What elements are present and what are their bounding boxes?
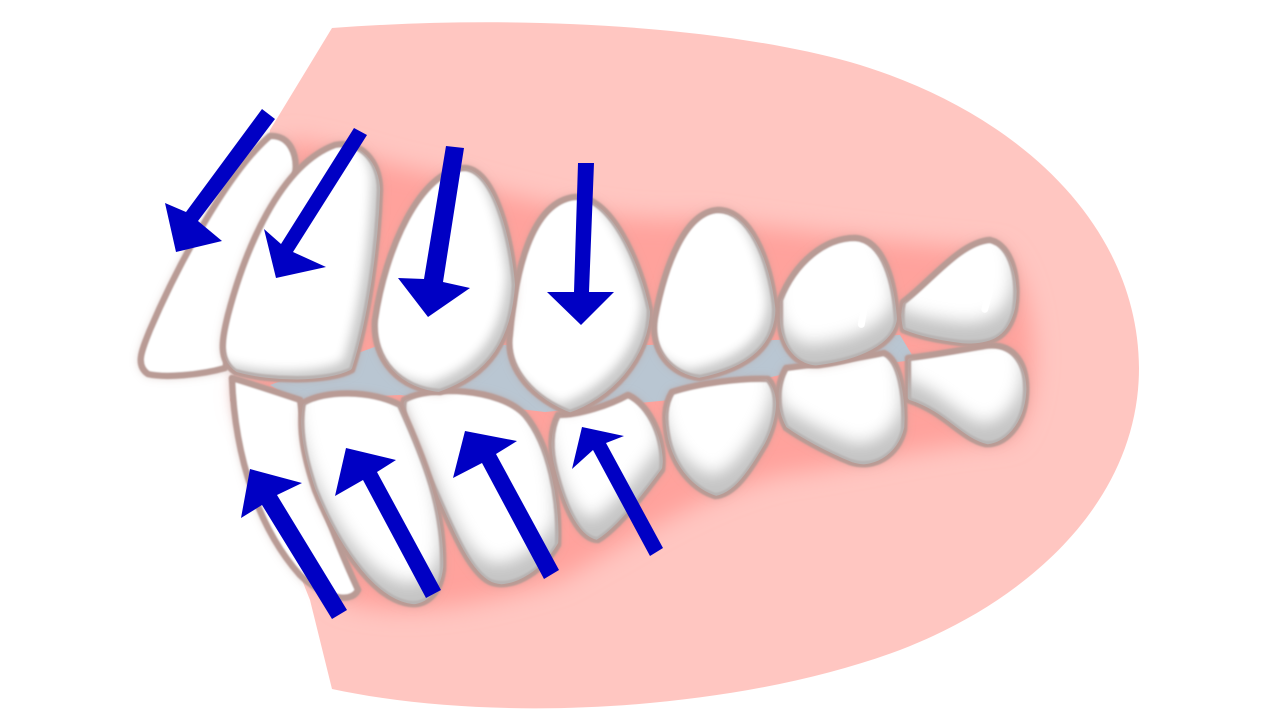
upper teeth xyxy=(141,136,1016,413)
lower premolar xyxy=(665,379,776,496)
upper tooth 4 xyxy=(509,197,650,413)
gap between teeth xyxy=(270,335,915,412)
gum xyxy=(230,22,1139,708)
upper premolar xyxy=(654,210,775,378)
arrow: upper 2 xyxy=(264,128,367,278)
arrow: lower 4 xyxy=(572,427,663,556)
lower tooth 6 xyxy=(403,391,558,584)
arrow: upper 3 xyxy=(398,146,470,317)
upper tooth 3 xyxy=(375,168,515,392)
lower molar xyxy=(778,353,904,464)
upper tooth 2 xyxy=(223,144,380,379)
lower tooth 5 (far left) xyxy=(232,378,358,598)
inner mouth shading xyxy=(240,140,1033,609)
lower tooth 4 xyxy=(552,395,663,540)
arrow: lower 3 xyxy=(453,431,559,579)
upper front tooth (outer) xyxy=(141,136,296,376)
arrow: upper 1 xyxy=(165,109,275,252)
arrow: lower 1 xyxy=(241,469,347,619)
lower teeth xyxy=(232,346,1026,604)
arrow: lower 2 xyxy=(335,448,441,598)
lower back molar xyxy=(908,346,1026,444)
upper molar xyxy=(780,238,897,365)
upper back molar xyxy=(902,240,1016,343)
arrow: upper 4 xyxy=(547,163,614,325)
lower tooth 7 xyxy=(301,393,443,604)
arrows xyxy=(165,109,663,619)
